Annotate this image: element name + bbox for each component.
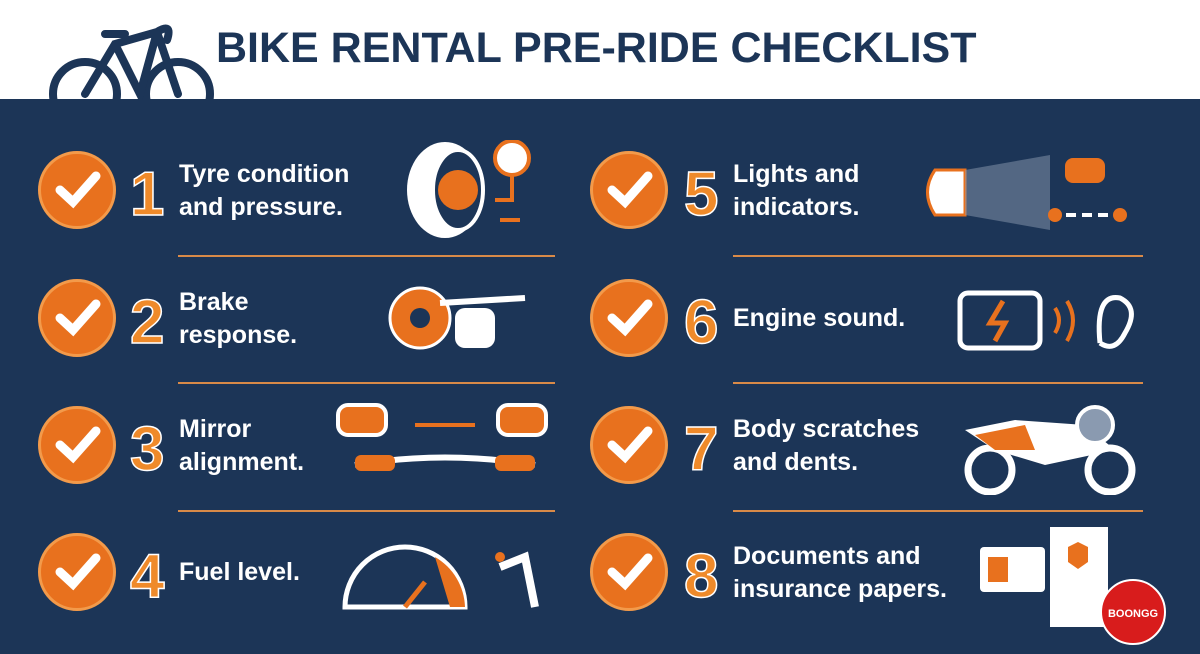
icon: tyre gauge: [407, 140, 531, 238]
item 5: [590, 151, 1127, 230]
item 3: [38, 403, 548, 484]
icon: brake: [388, 286, 526, 350]
item 3: 3: [130, 415, 164, 484]
item 3: alignment.: [179, 448, 304, 476]
icon: engine and ear: [958, 290, 1134, 350]
item 6: 6: [684, 288, 718, 357]
icon: fuel gauge and nozzle: [342, 544, 539, 610]
item 3: Mirror: [179, 415, 251, 443]
item 2: [38, 279, 526, 357]
item 4: Fuel level.: [179, 558, 300, 586]
item 2: Brake: [179, 288, 248, 316]
icon: motorcycle: [964, 405, 1136, 495]
icon: documents with badge: BOONGG: [1108, 608, 1158, 620]
title: BIKE RENTAL PRE-RIDE CHECKLIST: [216, 24, 976, 72]
icon: documents with badge: [980, 527, 1166, 645]
item 8: Documents and: [733, 542, 921, 570]
item 7: [590, 405, 1136, 495]
item 2: response.: [179, 321, 297, 349]
item 5: indicators.: [733, 193, 859, 221]
item 1: 1: [130, 160, 164, 229]
item 7: 7: [684, 415, 718, 484]
item 4: 4: [130, 542, 164, 611]
item 1: [38, 140, 531, 238]
item 1: Tyre condition: [179, 160, 349, 188]
item 8: [590, 527, 1166, 645]
item 7: Body scratches: [733, 415, 919, 443]
item 2: 2: [130, 288, 164, 357]
item 6: Engine sound.: [733, 304, 905, 332]
item 8: 8: [684, 542, 718, 611]
item 7: and dents.: [733, 448, 858, 476]
item 6: [590, 279, 1134, 357]
item 5: Lights and: [733, 160, 859, 188]
icon: mirrors: [336, 403, 548, 471]
header band: [0, 0, 1200, 99]
item 5: 5: [684, 160, 718, 229]
icon: bicycle: [49, 24, 214, 99]
item 8: insurance papers.: [733, 575, 947, 603]
item 1: and pressure.: [179, 193, 343, 221]
item 4: [38, 533, 539, 611]
icon: lights: [926, 155, 1127, 230]
